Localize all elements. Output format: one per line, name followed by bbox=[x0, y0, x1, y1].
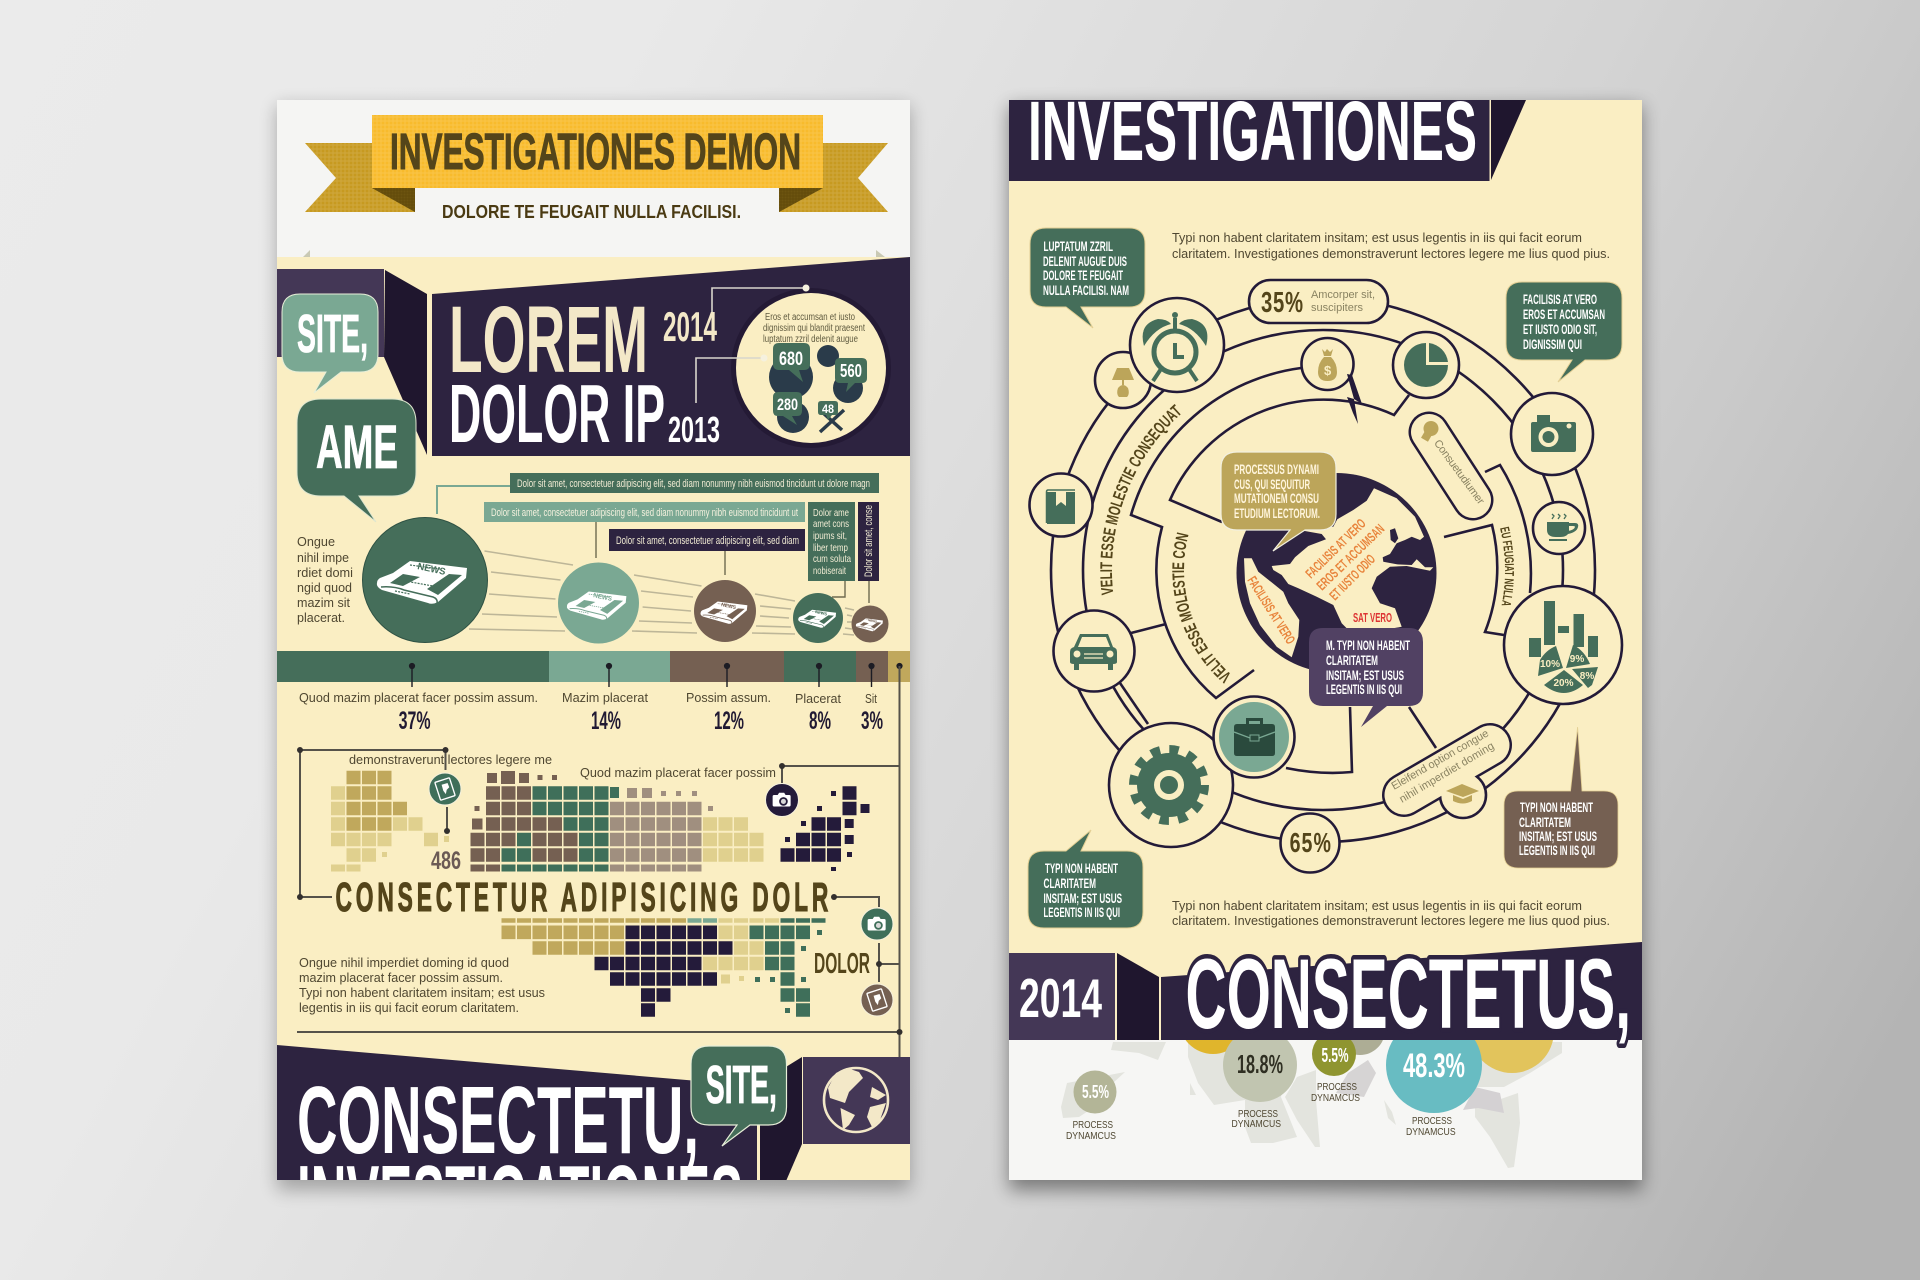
connector dots bbox=[760, 284, 810, 362]
bubble text: green top right: DIGNISSIM QUI bbox=[1523, 336, 1582, 352]
globe text: EROS ET ACCUMSAN bbox=[1314, 521, 1387, 593]
intro text: Typi non habent claritatem insitam; est usus legentis in iis qui facit eorum bbox=[1172, 230, 1582, 245]
bubble text: purple: M. TYPI NON HABENT bbox=[1326, 637, 1410, 653]
icon: alarm clock bbox=[1130, 298, 1224, 392]
header: white paper band bbox=[277, 100, 910, 257]
dark header band bbox=[432, 257, 910, 456]
side text bbox=[297, 534, 353, 625]
bubble text: tan: MUTATIONEM CONSU bbox=[1234, 490, 1319, 506]
bubble text: brown bbox=[1519, 799, 1597, 858]
heading: dolor ip: DOLOR IP bbox=[449, 367, 665, 460]
bubble labels: DYNAMCUS bbox=[1406, 1127, 1456, 1138]
corner folds bbox=[303, 250, 885, 257]
bubble: tan bbox=[1221, 452, 1336, 551]
bar percentages: 14% bbox=[591, 707, 621, 735]
bubble text: tan: ETUDIUM LECTORUM. bbox=[1234, 505, 1320, 521]
news circle 2 bbox=[558, 562, 639, 644]
text block: Typi non habent claritatem insitam; est usus bbox=[299, 985, 545, 1000]
ring diagram lines bbox=[1051, 298, 1595, 842]
label: tall green: nobiserait bbox=[813, 565, 846, 577]
icon: money bag bbox=[1302, 338, 1354, 390]
bottom band: dark bbox=[1161, 942, 1642, 1040]
bubble text: green top right bbox=[1523, 291, 1605, 352]
icon: camera dark bbox=[766, 784, 798, 816]
bubble text: green top right: EROS ET ACCUMSAN bbox=[1523, 306, 1605, 322]
circle ball chart: 280 bbox=[777, 395, 798, 414]
globe text: FACILISIS AT VERO bbox=[1303, 516, 1369, 581]
bubble labels: PROCESS bbox=[1317, 1082, 1357, 1093]
bubble labels bbox=[1066, 1082, 1456, 1142]
ribbon banner bbox=[305, 115, 888, 212]
icon: car bbox=[1054, 610, 1134, 692]
pill: 35 percent: Amcorper sit, bbox=[1311, 289, 1375, 301]
bubble text: purple: LEGENTIS IN IIS QUI bbox=[1326, 681, 1402, 697]
heading: lorem: LOREM bbox=[449, 287, 648, 393]
label: tall green: ipums sit, bbox=[813, 530, 847, 542]
curved text: inner band: VELIT ESSE MOLESTIE CON bbox=[1172, 532, 1230, 684]
value 486: 486 bbox=[431, 847, 461, 875]
stacked percentage bar bbox=[277, 651, 910, 682]
bar labels: Placerat bbox=[795, 691, 841, 706]
icon: money bag: $ bbox=[1324, 363, 1332, 378]
purple square with globe bbox=[803, 1057, 910, 1144]
bottom band: year square bbox=[1009, 953, 1115, 1040]
icon: map card green bbox=[429, 773, 461, 805]
bubble text: tan: CUS, QUI SEQUITUR bbox=[1234, 476, 1310, 492]
icon: briefcase bbox=[1214, 696, 1294, 778]
intro text bbox=[1172, 230, 1610, 261]
side text: mazim sit bbox=[297, 595, 350, 610]
bubble text: ame: AME bbox=[316, 413, 398, 481]
side text: placerat. bbox=[297, 610, 345, 625]
bubble text: green bottom: INSITAM; EST USUS bbox=[1044, 890, 1122, 906]
curved text: outer band: VELIT ESSE MOLESTIE CONSEQUAT bbox=[1100, 404, 1181, 596]
bubble text: green bottom: CLARITATEM bbox=[1044, 875, 1096, 891]
bubble circles bbox=[1074, 986, 1554, 1114]
bubble text: tan bbox=[1234, 461, 1320, 521]
globe text: ET IUSTO ODIO bbox=[1327, 552, 1378, 603]
news circle 4: NEWS bbox=[815, 609, 828, 617]
panel: left infographic bbox=[277, 100, 910, 1253]
circle ball chart: 560 bbox=[840, 361, 862, 381]
label: tall green: liber temp bbox=[813, 542, 848, 554]
news circle 5 bbox=[852, 606, 888, 642]
icon: bar and pie chart: 9% bbox=[1570, 654, 1584, 665]
lower text: claritatem. Investigationes demonstraverunt lectores legere me lius quod pius. bbox=[1172, 913, 1610, 928]
year 2014: 2014 bbox=[663, 303, 717, 350]
bubble values bbox=[1082, 1045, 1465, 1102]
bubble text: green top right: FACILISIS AT VERO bbox=[1523, 291, 1597, 307]
bar percentages: 8% bbox=[809, 707, 831, 735]
bar pins bbox=[409, 663, 902, 687]
news circle 3 bbox=[694, 580, 756, 642]
globe bbox=[1236, 473, 1436, 673]
news circle 1: NEWS bbox=[416, 561, 447, 578]
subtitle: DOLORE TE FEUGAIT NULLA FACILISI. bbox=[442, 202, 741, 222]
side text: rdiet domi bbox=[297, 565, 353, 580]
curved text: right band: EU FEUGIAT NULLA bbox=[1500, 526, 1514, 606]
circle ball chart: 48 bbox=[822, 402, 834, 416]
bubble text: site bottom: SITE, bbox=[706, 1055, 777, 1115]
pill: consuetudiumer: Consuetudiumer bbox=[1431, 438, 1487, 507]
caption 2: Quod mazim placerat facer possim bbox=[580, 765, 776, 780]
bubble text: tan: PROCESSUS DYNAMI bbox=[1234, 461, 1319, 477]
bubble labels: DYNAMCUS bbox=[1066, 1131, 1116, 1142]
pill: consuetudiumer bbox=[1418, 418, 1487, 507]
pill: eleifend: nihil imperdiet doming bbox=[1397, 740, 1496, 806]
icon: bar and pie chart: 20% bbox=[1553, 678, 1574, 689]
bubble text: purple: INSITAM; EST USUS bbox=[1326, 667, 1404, 683]
side text: nihil impe bbox=[297, 550, 349, 565]
label connectors 2 bbox=[596, 522, 869, 603]
left panel shadow bbox=[277, 106, 910, 1190]
year 2013: 2013 bbox=[668, 409, 720, 450]
bubble text: brown: TYPI NON HABENT bbox=[1520, 799, 1593, 815]
icon: lightning arrow bbox=[1347, 374, 1362, 424]
bottom dark band bbox=[277, 1045, 757, 1180]
bubble text: green top left: NULLA FACILISI. NAM bbox=[1043, 282, 1129, 298]
bubble text: green bottom: TYPI NON HABENT bbox=[1045, 860, 1118, 876]
header fold shade bbox=[384, 270, 427, 455]
side text: Ongue bbox=[297, 534, 335, 549]
news circle 1 bbox=[362, 518, 488, 642]
bubble: purple bbox=[1309, 628, 1423, 727]
lower text bbox=[1172, 898, 1610, 928]
bubble text: green top left: LUPTATUM ZZRIL bbox=[1044, 238, 1113, 254]
bar labels: Possim assum. bbox=[686, 690, 771, 705]
label: dark: Dolor sit amet, consectetuer adipiscing elit, sed diam bbox=[616, 535, 799, 547]
bubble text: green bottom bbox=[1044, 860, 1122, 920]
top dark band bbox=[1009, 100, 1490, 181]
pill: 35 percent bbox=[1249, 280, 1388, 323]
circle: 65 percent: 65% bbox=[1290, 828, 1331, 859]
pixel map: upper bbox=[331, 771, 870, 871]
label connectors bbox=[437, 486, 510, 514]
fold shade bbox=[760, 1057, 802, 1180]
globe text bbox=[1244, 516, 1392, 647]
right panel shadow bbox=[1009, 106, 1642, 1190]
icon: bar and pie chart bbox=[1504, 586, 1622, 704]
circle ball chart bbox=[731, 288, 891, 448]
bubble text: brown: LEGENTIS IN IIS QUI bbox=[1519, 842, 1595, 858]
circle ball chart: luptatum zzril delenit augue bbox=[763, 334, 858, 345]
pill: eleifend: Eleifend option congue bbox=[1390, 728, 1491, 793]
bubble text: green top right: ET IUSTO ODIO SIT, bbox=[1523, 321, 1597, 337]
top heading: INVESTIGATIONES bbox=[1028, 84, 1477, 178]
icon: coffee cup bbox=[1533, 502, 1585, 554]
circle: 65 percent bbox=[1280, 814, 1340, 872]
top fold shade bbox=[1491, 100, 1526, 180]
bar percentages: 37% bbox=[399, 707, 431, 735]
bubble: green bottom bbox=[1028, 830, 1143, 928]
text block: mazim placerat facer possim assum. bbox=[299, 970, 503, 985]
icon: camera bbox=[1511, 393, 1593, 475]
label: tall green bbox=[808, 502, 855, 581]
bar labels bbox=[300, 692, 877, 704]
icon: gear bbox=[1109, 723, 1233, 847]
icon: bar and pie chart: 10% bbox=[1540, 659, 1560, 670]
news circle 3: NEWS bbox=[721, 602, 737, 611]
bubble values: 18.8% bbox=[1237, 1049, 1283, 1079]
bubble labels: PROCESS bbox=[1412, 1116, 1452, 1127]
bubble: green top right bbox=[1506, 282, 1622, 382]
lower text: Typi non habent claritatem insitam; est usus legentis in iis qui facit eorum bbox=[1172, 898, 1582, 913]
label: tall green: amet cons bbox=[813, 518, 849, 530]
label: top green bbox=[510, 473, 879, 493]
bubble labels: PROCESS bbox=[1238, 1109, 1278, 1120]
label: tall green: Dolor ame bbox=[813, 507, 849, 519]
text block: Ongue nihil imperdiet doming id quod bbox=[299, 955, 509, 970]
label: top green: Dolor sit amet, consectetuer adipiscing elit, sed diam nonummy nibh euismod tincidunt ut dolore magn bbox=[517, 478, 870, 490]
speech bubble: site bottom bbox=[691, 1046, 786, 1146]
world map panel bbox=[1009, 1040, 1642, 1180]
icon: pie chart bbox=[1393, 332, 1459, 398]
news circle 5: NEWS bbox=[868, 618, 877, 624]
news circle 4 bbox=[793, 593, 843, 643]
text block: legentis in iis qui facit eorum claritatem. bbox=[299, 1000, 519, 1015]
icon: bar and pie chart: 8% bbox=[1580, 671, 1594, 682]
globe text: SAT VERO bbox=[1353, 610, 1392, 625]
text block bbox=[299, 955, 545, 1015]
bubble values: 5.5% bbox=[1082, 1082, 1109, 1102]
pill: eleifend bbox=[1390, 728, 1496, 818]
bottom heading: CONSECTETU, bbox=[297, 1067, 699, 1174]
bubble text: brown: INSITAM; EST USUS bbox=[1519, 828, 1597, 844]
label: light green: Dolor sit amet, consectetuer adipiscing elit, sed diam nonummy nibh euismod tincidunt ut bbox=[491, 507, 798, 519]
bubble labels: DYNAMCUS bbox=[1311, 1093, 1360, 1104]
pixel map: lower bbox=[502, 920, 826, 1013]
globe text: FACILISIS AT VERO bbox=[1244, 574, 1298, 647]
connector dots bbox=[297, 747, 902, 1035]
speech bubble: site bbox=[282, 294, 378, 393]
bubble text: green top left bbox=[1043, 238, 1129, 298]
icon: book bbox=[1030, 474, 1092, 536]
news circle 2: NEWS bbox=[593, 592, 613, 603]
panel: right infographic bbox=[1009, 100, 1642, 1180]
pill: 35 percent: suscipiters bbox=[1311, 302, 1364, 314]
title: INVESTIGATIONES DEMON bbox=[390, 123, 801, 180]
bubble text: green bottom: LEGENTIS IN IIS QUI bbox=[1044, 904, 1120, 920]
bubble text: purple: CLARITATEM bbox=[1326, 652, 1378, 668]
label: dolor: DOLOR bbox=[814, 948, 870, 980]
circle ball chart: 680 bbox=[779, 349, 803, 370]
bar percentages bbox=[399, 711, 883, 729]
bar labels: Sit bbox=[865, 691, 877, 706]
bubble values: 48.3% bbox=[1403, 1047, 1465, 1085]
bubble labels: DYNAMCUS bbox=[1232, 1119, 1281, 1130]
connector frame bbox=[297, 666, 900, 1057]
year 2014: 2014 bbox=[1019, 967, 1102, 1029]
bubble text: purple bbox=[1326, 637, 1410, 697]
bubble: brown bbox=[1504, 727, 1618, 868]
label: tall dark bbox=[858, 502, 879, 581]
icon: map card brown bbox=[861, 984, 893, 1016]
label: light green bbox=[484, 502, 805, 522]
bar labels: Mazim placerat bbox=[562, 690, 648, 705]
map heading: CONSECTETUR ADIPISICING DOLR bbox=[336, 874, 828, 920]
speech bubble: ame bbox=[297, 399, 416, 522]
label: dark bbox=[609, 529, 805, 551]
bubble text: green top left: DELENIT AUGUE DUIS bbox=[1043, 253, 1127, 269]
bubble text: green top left: DOLORE TE FEUGAIT bbox=[1043, 267, 1123, 283]
circle ball chart: Eros et accumsan et iusto bbox=[765, 312, 855, 323]
pill: 35 percent: 35% bbox=[1261, 287, 1303, 319]
bubble text: brown: CLARITATEM bbox=[1519, 814, 1571, 830]
label: tall dark: Dolor sit amet, conse bbox=[863, 505, 875, 577]
perspective rays bbox=[469, 551, 854, 635]
circle ball chart: dignissim qui blandit praesent bbox=[763, 323, 865, 334]
side text: ngid quod bbox=[297, 580, 352, 595]
bottom heading clipped: INVESTIGATIONES bbox=[297, 1146, 743, 1253]
bar labels: Quod mazim placerat facer possim assum. bbox=[299, 690, 538, 705]
intro text: claritatem. Investigationes demonstraverunt lectores legere me lius quod pius. bbox=[1172, 246, 1610, 261]
label: tall green: cum soluta bbox=[813, 553, 851, 565]
bar percentages: 3% bbox=[861, 707, 883, 735]
bubble labels: PROCESS bbox=[1073, 1120, 1113, 1131]
connector lines to circle bbox=[696, 288, 806, 403]
bar percentages: 12% bbox=[714, 707, 744, 735]
icon: lamp bbox=[1095, 352, 1151, 408]
bottom band: fold bbox=[1117, 953, 1159, 1040]
bubble text: site: SITE, bbox=[297, 304, 368, 364]
icon: camera green bbox=[861, 908, 893, 940]
bubble values: 5.5% bbox=[1322, 1045, 1349, 1067]
bubble: green top left bbox=[1030, 228, 1145, 328]
caption: demonstraverunt lectores legere me bbox=[349, 752, 552, 767]
purple square bbox=[277, 269, 384, 357]
